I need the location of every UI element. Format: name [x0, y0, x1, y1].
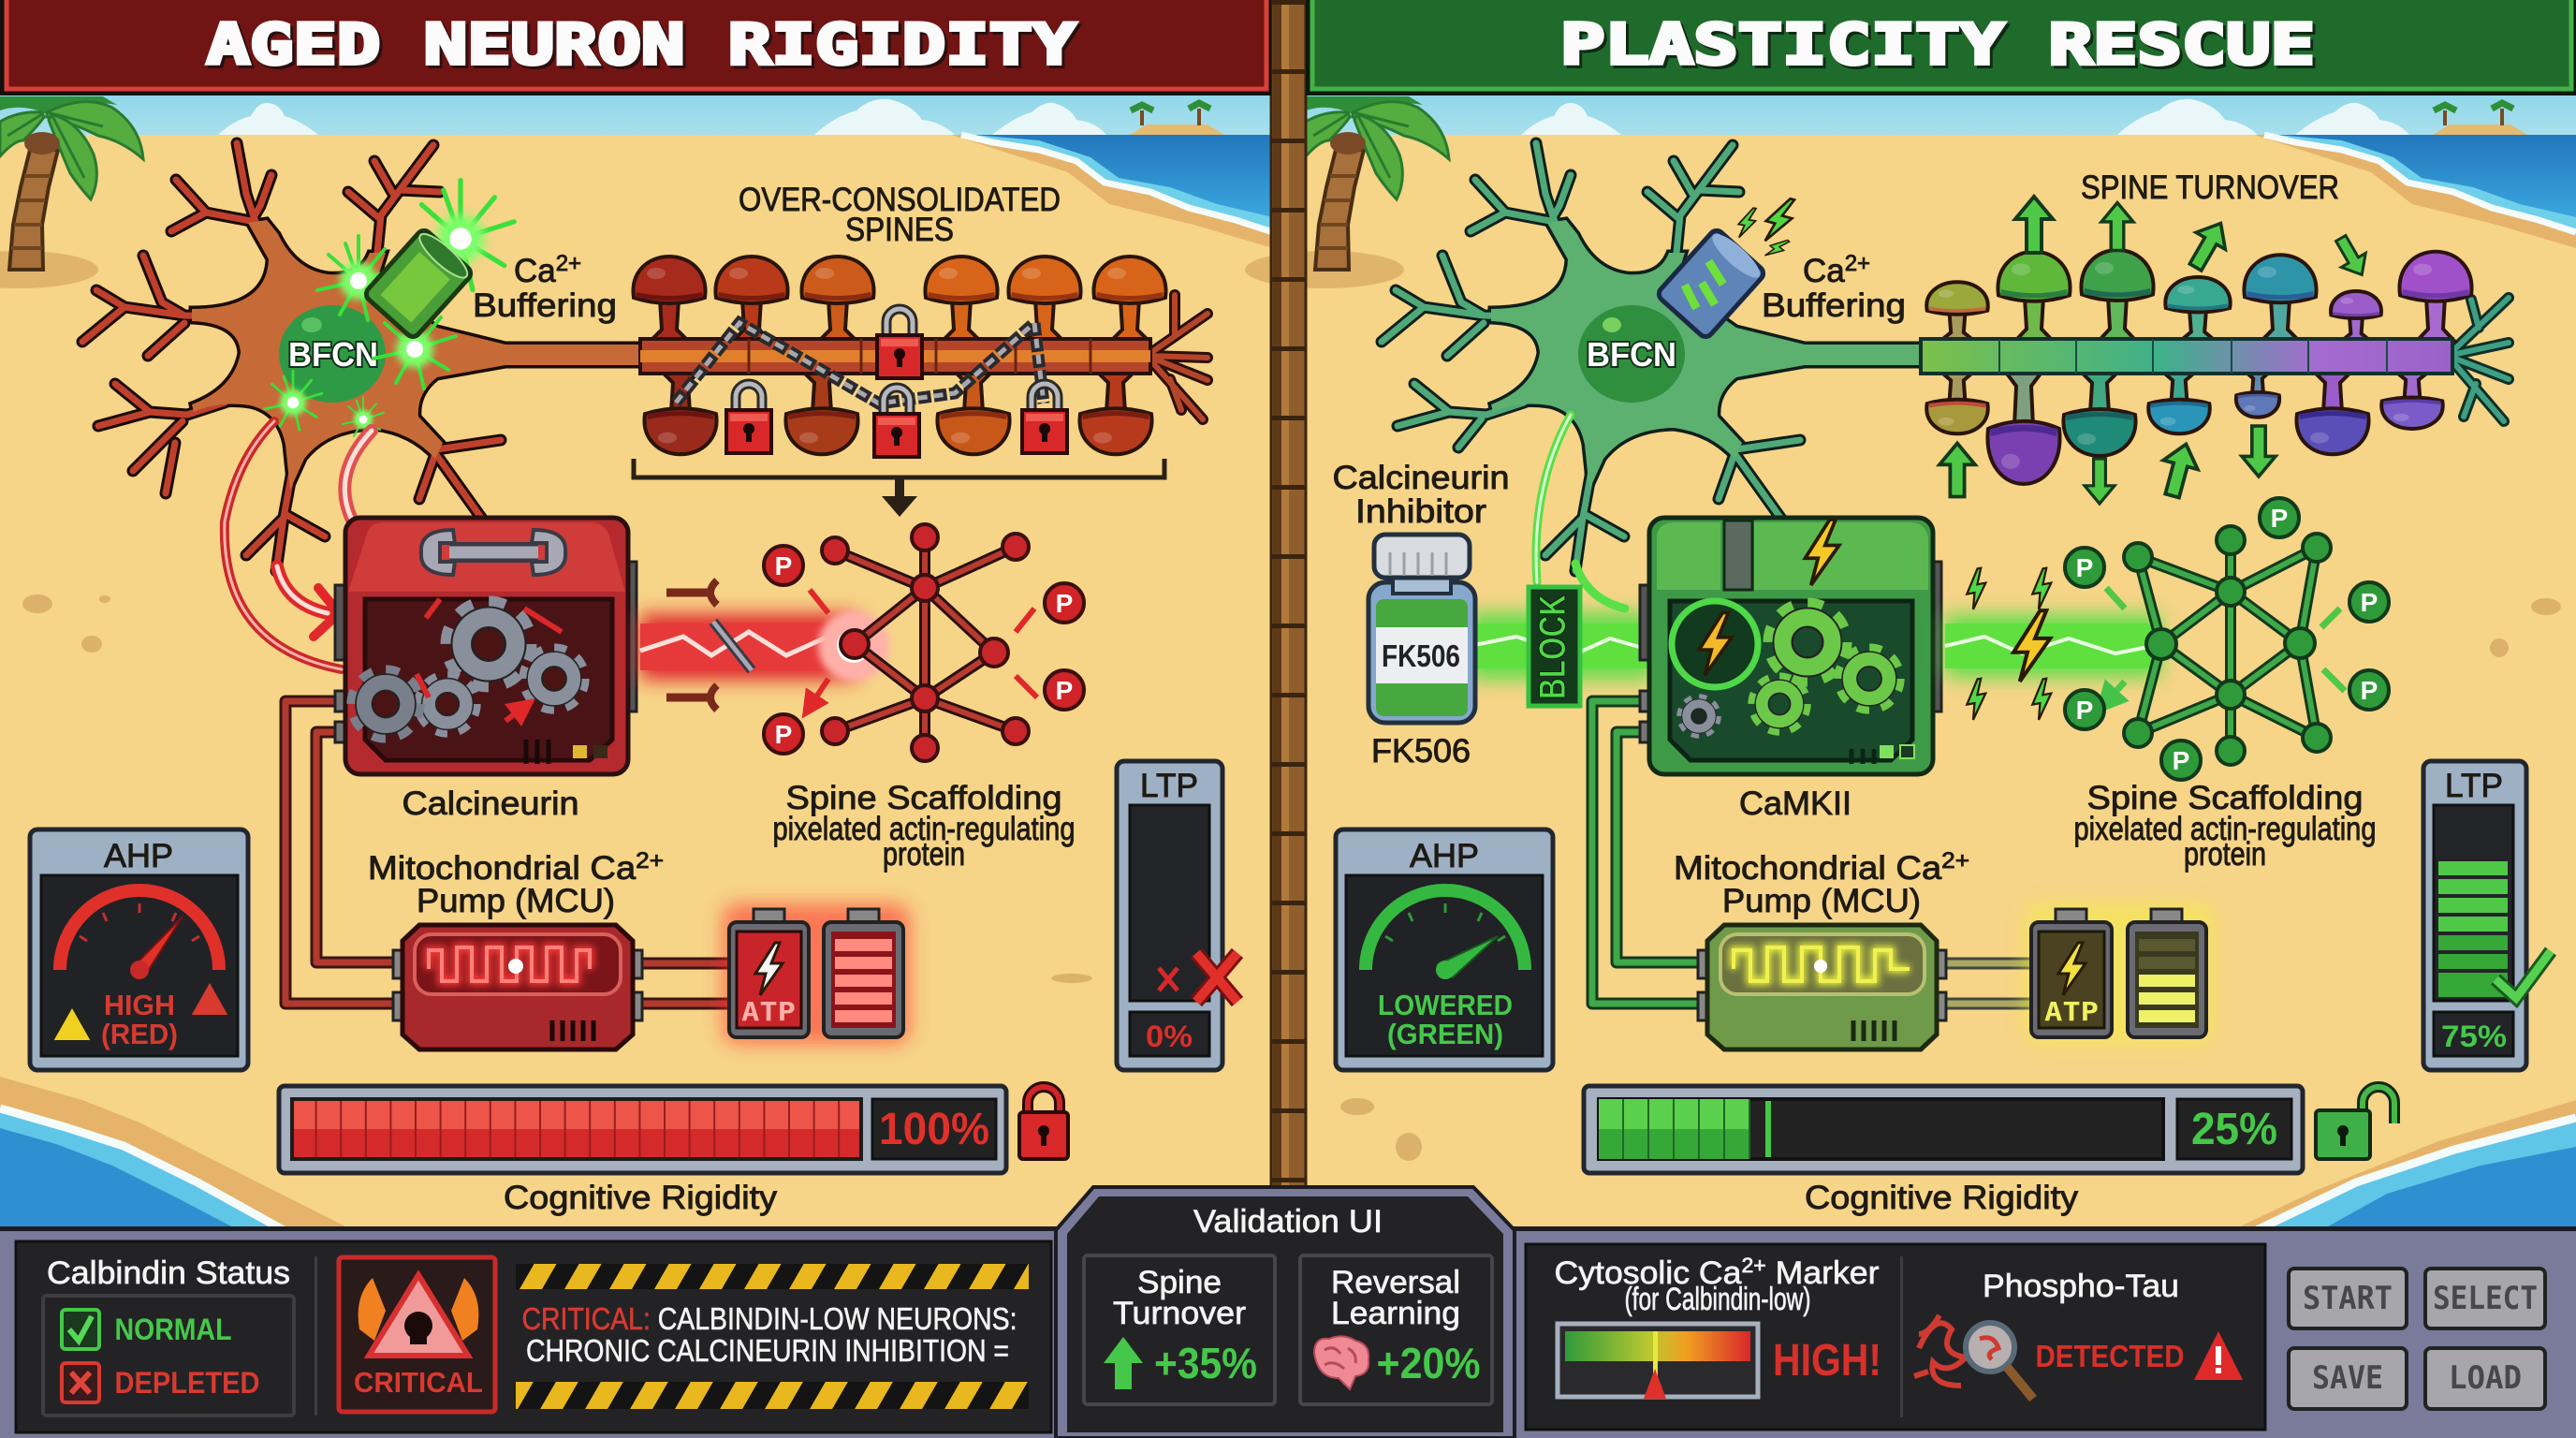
CaMKII machine	[1640, 518, 1941, 774]
label: spine turnover: SPINE TURNOVER	[2081, 169, 2339, 206]
panel: cytosolic marker and phospho-tau: Cytosolic Ca	[1554, 1255, 1733, 1291]
label: Ca buffering left: 2+	[556, 251, 581, 276]
label: calcineurin inhibitor: Calcineurin	[1333, 460, 1509, 496]
beach scene: left panel	[0, 92, 1273, 248]
chains	[676, 323, 1044, 404]
header: plasticity rescue	[1306, 0, 2576, 95]
nucleus right	[1578, 305, 1685, 403]
neuron left	[82, 143, 640, 571]
label: spine scaffolding right: protein	[2184, 836, 2266, 873]
warning icons	[52, 1006, 92, 1041]
title left: AGED NEURON RIGIDITY	[206, 12, 1076, 78]
spine scaffolding network right: P	[2076, 553, 2093, 582]
nucleus right: BFCN	[1587, 335, 1676, 374]
phospho badges right	[2260, 498, 2299, 537]
label: spine scaffolding left	[773, 780, 1075, 873]
calbindin vial blue with bolts	[1656, 194, 1797, 340]
normal row: NORMAL	[114, 1313, 232, 1346]
hazard stripes	[516, 1264, 1029, 1289]
button: save	[2289, 1348, 2407, 1409]
label: Ca buffering left: Ca	[514, 253, 556, 289]
AHP gauge panel left: AHP	[104, 838, 173, 874]
label: cognitive rigidity left: Cognitive Rigidity	[504, 1180, 778, 1216]
label: spine scaffolding right: pixelated actin-regulating	[2074, 811, 2376, 847]
panel: validation UI: Validation UI	[1193, 1204, 1383, 1240]
panel: validation UI	[1067, 1196, 1503, 1432]
label: spine scaffolding right: Spine Scaffolding	[2087, 780, 2363, 816]
tau tangle and magnifier	[1914, 1315, 2033, 1399]
label: MCU right: Pump (MCU)	[1722, 883, 1921, 919]
spine scaffolding network right: P	[2173, 746, 2189, 775]
ATP battery left	[723, 903, 910, 1044]
label: spine scaffolding left: Spine Scaffolding	[786, 780, 1061, 816]
BLOCK tag	[1529, 587, 1580, 706]
critical text	[522, 1301, 1017, 1368]
label: MCU right: Mitochondrial Ca	[1674, 850, 1920, 887]
button: start	[2289, 1269, 2407, 1328]
label: over-consolidated spines	[739, 182, 1061, 248]
critical warning badge: CRITICAL	[354, 1366, 483, 1399]
label: Ca buffering left	[473, 251, 617, 324]
panel: cytosolic marker and phospho-tau: 2+	[1741, 1254, 1766, 1277]
warning triangle	[2194, 1331, 2243, 1380]
button: start: START	[2303, 1280, 2393, 1317]
label: spine scaffolding left: protein	[883, 836, 965, 873]
nucleus with BFCN label	[279, 305, 386, 403]
spine turnover stat	[1084, 1255, 1275, 1404]
label: Ca buffering left: Buffering	[473, 287, 617, 324]
LTP panel right: 75%	[2441, 1020, 2507, 1053]
label: Ca buffering right	[1762, 251, 1906, 324]
terminal branches right	[2448, 298, 2509, 421]
label: Ca buffering right: Buffering	[1762, 287, 1906, 324]
LTP panel left	[1117, 761, 1237, 1070]
depleted row: DEPLETED	[114, 1366, 260, 1400]
LTP panel right	[2423, 761, 2551, 1070]
ATP battery right	[2026, 903, 2213, 1044]
label: MCU left	[368, 848, 664, 919]
palm tree right	[1245, 96, 1449, 288]
label: over-consolidated spines: OVER-CONSOLIDATED	[739, 182, 1061, 218]
gears	[446, 602, 531, 686]
FK506 vial: FK506	[1382, 638, 1460, 673]
panel: cytosolic marker and phospho-tau	[1526, 1244, 2265, 1430]
spine scaffolding network right	[2065, 498, 2389, 780]
label: MCU left: Mitochondrial Ca	[368, 850, 614, 887]
critical warning badge	[339, 1257, 495, 1412]
cognitive rigidity bar left: 100%	[879, 1105, 989, 1154]
over-consolidated spine dendrite	[633, 257, 1208, 457]
bottom-left shoreline	[0, 1077, 353, 1230]
dynamic spine dendrite	[1921, 197, 2509, 504]
small wrenches	[666, 593, 711, 697]
green arcs from neuron	[1536, 415, 1625, 609]
phospho arrows	[810, 590, 1037, 707]
phospho badges	[764, 546, 803, 585]
label: spine scaffolding left: pixelated actin-regulating	[773, 811, 1075, 847]
sand specks	[22, 594, 2561, 1161]
label: Ca buffering right: 2+	[1845, 251, 1870, 276]
AHP gauge panel right	[1336, 829, 1553, 1070]
label: MCU left: 2+	[636, 848, 664, 873]
BLOCK tag: BLOCK	[1532, 594, 1573, 699]
LTP panel left: 0%	[1146, 1020, 1193, 1053]
label: MCU right: 2+	[1941, 848, 1969, 873]
button: load	[2425, 1348, 2545, 1409]
AHP gauge panel right: LOWERED	[1378, 989, 1513, 1021]
cognitive rigidity bar right	[1584, 1086, 2394, 1173]
bottom-right shoreline	[2232, 1100, 2576, 1230]
label: spine scaffolding right	[2074, 780, 2376, 873]
depleted row	[62, 1363, 260, 1402]
log divider	[1271, 0, 1306, 1208]
panel: cytosolic marker and phospho-tau: DETECTED	[2035, 1339, 2185, 1373]
button: select	[2425, 1269, 2545, 1328]
label: Ca buffering right: Ca	[1803, 253, 1845, 289]
inhibitory red beam	[640, 580, 889, 710]
neuron right	[1382, 143, 1939, 571]
red padlock	[1019, 1087, 1068, 1159]
nucleus with BFCN label: BFCN	[288, 335, 378, 374]
calcium meter	[1558, 1324, 1758, 1399]
AHP gauge panel right: AHP	[1410, 838, 1479, 874]
label: CaMKII: CaMKII	[1739, 785, 1852, 822]
normal row	[62, 1310, 232, 1349]
spine scaffolding network right: P	[2076, 696, 2093, 725]
AHP gauge panel left: HIGH	[104, 989, 175, 1021]
panel: cytosolic marker and phospho-tau: Marker	[1766, 1255, 1880, 1291]
charge battery	[824, 909, 903, 1037]
AHP gauge panel left: (RED)	[101, 1018, 178, 1050]
label: MCU left: Pump (MCU)	[417, 883, 615, 919]
label: calcineurin inhibitor	[1333, 460, 1509, 530]
spine turnover stat: Turnover	[1113, 1296, 1246, 1331]
cognitive rigidity bar right: 25%	[2191, 1105, 2277, 1154]
panel: calbindin and critical	[16, 1241, 1051, 1432]
terminal branches	[1147, 295, 1208, 419]
panel: cytosolic marker and phospho-tau: (for Calbindin-low)	[1625, 1282, 1810, 1317]
wrench icon	[421, 530, 565, 575]
open padlock	[2316, 1087, 2394, 1159]
reversal learning stat: Learning	[1331, 1296, 1460, 1331]
label: calcineurin: Calcineurin	[402, 785, 578, 822]
small bolts	[1963, 567, 1990, 610]
spine scaffolding network left: P	[1056, 676, 1073, 705]
green activation beam	[1945, 567, 2162, 721]
phospho badges right: P	[2271, 504, 2288, 533]
header: aged neuron rigidity	[0, 0, 1271, 95]
label: cognitive rigidity right: Cognitive Rigidity	[1805, 1180, 2079, 1216]
panel: cytosolic marker and phospho-tau: Phospho-Tau	[1983, 1269, 2179, 1304]
spine turnover stat: Spine	[1137, 1265, 1222, 1300]
spine turnover stat: +35%	[1154, 1339, 1257, 1387]
validation tab frame	[1056, 1187, 1515, 1438]
spine scaffolding network left	[764, 524, 1084, 761]
label: over-consolidated spines: SPINES	[845, 212, 954, 248]
button: select: SELECT	[2433, 1280, 2538, 1317]
calbindin cylinder with sparks	[264, 181, 514, 439]
phospho badges: P	[775, 551, 792, 580]
pipes right	[1592, 701, 1709, 1004]
button: save: SAVE	[2312, 1359, 2383, 1397]
reversal learning stat: Reversal	[1331, 1265, 1460, 1300]
label: calcineurin inhibitor: Inhibitor	[1355, 493, 1486, 530]
MCU pump left	[393, 925, 732, 1049]
spine scaffolding network right: P	[2361, 588, 2378, 617]
spine scaffolding network left: P	[775, 720, 792, 749]
calcineurin machine	[335, 518, 637, 774]
critical text: CRITICAL: CALBINDIN-LOW NEURONS:	[522, 1301, 1017, 1336]
green beam FK506 through block	[1470, 612, 1652, 680]
panel: calbindin and critical: Calbindin Status	[47, 1255, 290, 1291]
reversal learning stat: +20%	[1376, 1339, 1481, 1387]
ATP battery right: ATP	[2044, 996, 2099, 1027]
bolt dial and gears	[1672, 601, 1758, 687]
button: load: LOAD	[2449, 1359, 2522, 1397]
ATP battery left: ATP	[741, 996, 796, 1027]
MCU pump right	[1698, 925, 2033, 1049]
turnover arrows	[2015, 197, 2053, 253]
AHP gauge panel left	[30, 829, 248, 1070]
bottom HUD bar	[0, 1187, 2576, 1438]
beach scene: right panel	[1303, 92, 2576, 248]
palm tree left	[0, 96, 143, 288]
check mark	[2496, 951, 2551, 998]
reversal learning stat	[1300, 1255, 1492, 1404]
spine scaffolding network right: P	[2361, 676, 2378, 705]
LTP panel right: LTP	[2445, 768, 2503, 804]
wrench in beam	[713, 622, 752, 670]
title right: PLASTICITY RESCUE	[1560, 12, 2315, 78]
charge battery right	[2128, 909, 2206, 1037]
AHP gauge panel right: (GREEN)	[1387, 1018, 1503, 1050]
FK506 vial	[1368, 535, 1475, 723]
pipes from calcineurin to MCU	[285, 701, 404, 1004]
padlocks	[877, 309, 922, 378]
spine scaffolding network left: P	[1056, 589, 1073, 618]
label: FK506: FK506	[1371, 733, 1471, 770]
label: MCU right	[1674, 848, 1969, 919]
cognitive rigidity bar left	[279, 1086, 1068, 1173]
critical text: CHRONIC CALCINEURIN INHIBITION =	[526, 1333, 1009, 1368]
LTP panel left: LTP	[1140, 768, 1198, 804]
bracket arrow down	[634, 459, 1164, 517]
red signal streams into calcineurin	[225, 421, 372, 669]
panel: cytosolic marker and phospho-tau: HIGH!	[1773, 1336, 1881, 1386]
